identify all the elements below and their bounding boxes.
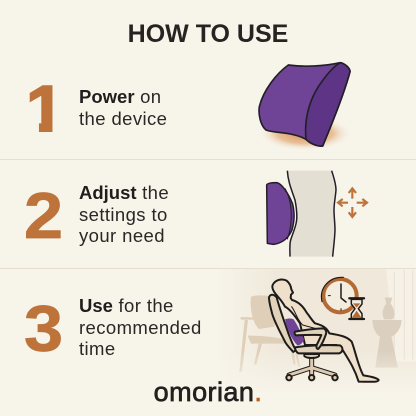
step 3 text: Use for the — [79, 295, 174, 316]
step 2 number: 2 — [24, 179, 63, 252]
step 1 text: Power on — [79, 86, 161, 107]
clock — [321, 277, 357, 312]
step 2 text: Adjust the — [79, 182, 169, 203]
step 1 text: the device — [79, 108, 167, 128]
step 2 text — [79, 182, 169, 246]
step 2 text: your need — [79, 225, 165, 246]
divider — [0, 268, 416, 269]
step 1 text — [79, 86, 167, 128]
step 3 number: 3 — [24, 292, 63, 365]
purple cushion — [285, 318, 304, 345]
chair back — [269, 295, 296, 352]
step 3 text: recommended — [79, 316, 202, 338]
step 3 text: time — [79, 338, 116, 359]
office chair base — [286, 354, 338, 380]
armrest — [295, 328, 326, 349]
step 3 text — [79, 295, 202, 359]
seat — [295, 345, 342, 353]
hourglass — [349, 298, 364, 319]
body — [272, 279, 379, 382]
step 2 text: settings to — [79, 204, 168, 224]
divider — [0, 159, 416, 160]
step 1 number: 1 — [26, 72, 65, 145]
brand logo: omorian. — [154, 377, 262, 407]
title: HOW TO USE — [128, 20, 288, 48]
